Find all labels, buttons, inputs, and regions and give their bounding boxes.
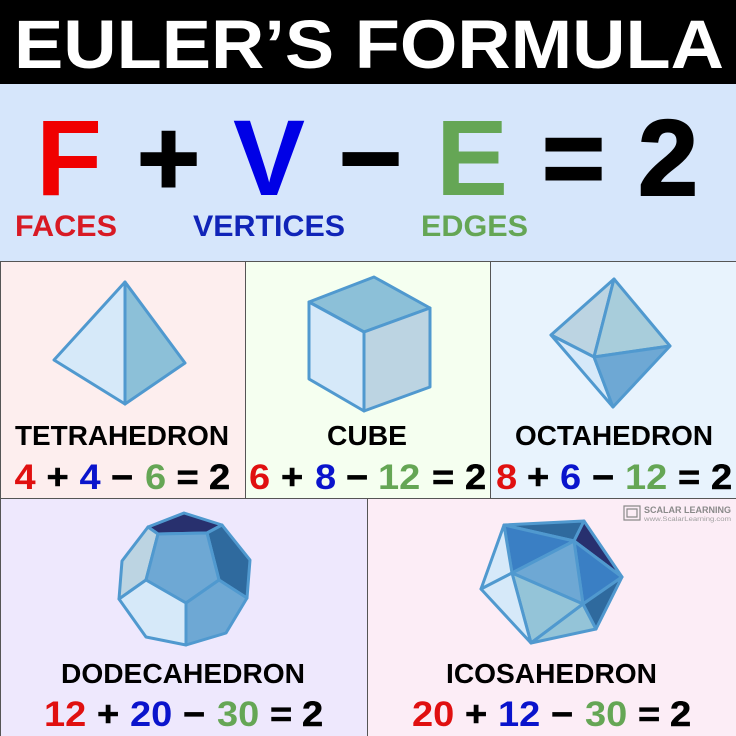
dodecahedron name: DODECAHEDRON [61,658,305,689]
label: edges: EDGES [421,210,528,243]
dodecahedron equation: − [183,694,205,734]
icon: logo [624,506,640,520]
dodecahedron equation: = [270,694,292,734]
icon: octahedron [551,279,670,407]
icosahedron equation: 12 [498,694,540,734]
panel: cube [246,262,490,498]
label: faces: FACES [15,210,117,243]
tetrahedron equation: − [111,457,133,497]
icosahedron equation: + [465,694,487,734]
formula equation: E [436,97,508,218]
cube equation: 2 [465,457,486,497]
octahedron equation: 12 [625,457,667,497]
tetrahedron equation: = [176,457,199,497]
tetrahedron equation: 4 [14,457,36,497]
formula equation: + [137,97,200,218]
panel: icosahedron [368,498,736,736]
cube equation: + [281,457,303,497]
cube name: CUBE [327,420,407,451]
octahedron equation: + [527,457,549,497]
dodecahedron equation: 12 [44,694,86,734]
icosahedron name: ICOSAHEDRON [446,658,657,689]
tetrahedron equation: + [46,457,69,497]
octahedron equation: 8 [496,457,517,497]
cube equation: 12 [378,457,420,497]
cube equation: = [432,457,454,497]
panel: formula [0,84,736,261]
watermark: Scalar Learning [624,505,731,523]
cube equation: 8 [315,457,336,497]
label: vertices: VERTICES [193,210,345,243]
octahedron equation: 2 [711,457,732,497]
octahedron equation: 6 [560,457,581,497]
tetrahedron equation: 6 [145,457,166,497]
tetrahedron equation: 4 [80,457,101,497]
tetrahedron equation: 2 [209,457,230,497]
watermark: Scalar Learning: www.ScalarLearning.com [643,516,731,523]
icon: dodecahedron [119,513,250,645]
icon: icosahedron [481,521,622,643]
panel: tetrahedron [0,262,246,498]
octahedron equation: − [592,457,614,497]
dodecahedron equation: 30 [217,694,259,734]
panel: dodecahedron [0,498,368,736]
octahedron equation: = [678,457,700,497]
formula equation: V [233,97,305,218]
icosahedron equation: 20 [412,694,454,734]
icosahedron equation: − [551,694,573,734]
icon: cube [309,277,430,411]
formula equation: 2 [638,97,698,218]
icosahedron equation: = [638,694,660,734]
formula equation: − [339,97,402,218]
dodecahedron equation: + [97,694,119,734]
icosahedron equation: 30 [585,694,627,734]
panel: octahedron [490,262,736,498]
dodecahedron equation: 20 [130,694,172,734]
tetrahedron name: TETRAHEDRON [15,420,229,451]
formula equation: = [542,97,605,218]
formula equation: F [36,97,102,218]
cube equation: 6 [249,457,270,497]
icon: tetrahedron [54,282,185,404]
formula equation [36,97,698,218]
icosahedron equation: 2 [670,694,691,734]
octahedron name: OCTAHEDRON [515,420,713,451]
dodecahedron equation: 2 [302,694,323,734]
cube equation: − [346,457,368,497]
title banner: EULER’S FORMULA [14,6,724,83]
watermark: Scalar Learning: SCALAR LEARNING [644,505,731,516]
